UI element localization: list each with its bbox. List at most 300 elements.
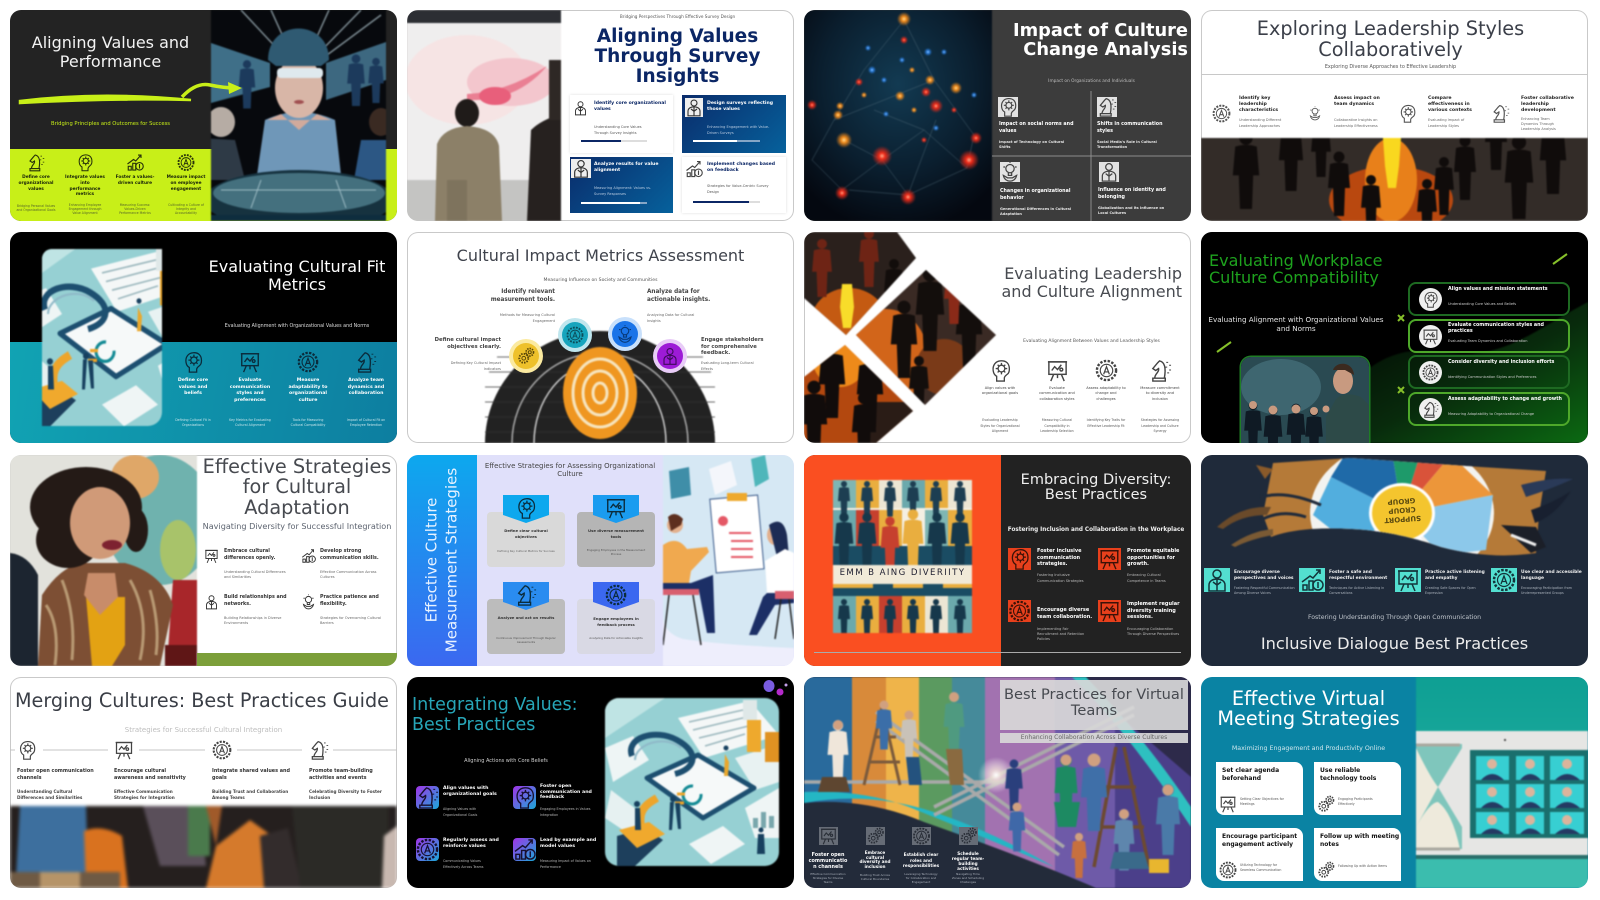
icon — [1419, 288, 1442, 311]
note: Evaluating Team Dynamics and Collaboration — [1448, 339, 1527, 343]
label: Engage employees in — [593, 616, 639, 621]
label: inclusion — [1152, 397, 1168, 401]
note — [1521, 586, 1572, 596]
item: Practice active listening and empathy — [1395, 568, 1487, 600]
label: sessions. — [1127, 614, 1153, 620]
poster: diversity illustration — [833, 480, 972, 633]
icon — [1098, 548, 1121, 570]
cell: Changes in organizational behavior — [998, 159, 1090, 219]
label — [1521, 96, 1574, 114]
card base — [577, 599, 655, 654]
card: Define clear cultural objectives — [487, 495, 565, 567]
item: Regularly assess and reinforce values — [416, 838, 506, 874]
label: adaptability to — [288, 385, 328, 390]
title: Best Practices for Virtual — [1004, 686, 1184, 703]
item: Identify key leadership characteristics — [1209, 95, 1297, 135]
card: Use reliable technology tools — [1314, 762, 1401, 815]
label: feedback process — [597, 622, 635, 626]
note — [1240, 797, 1284, 808]
note: Bridging Personal Values — [17, 204, 55, 208]
label: regular team- — [952, 856, 984, 861]
label: Analyze team — [348, 378, 384, 383]
wheel centre text: SUPPORT — [1384, 514, 1421, 524]
item: Implement regular diversity training sessions — [1098, 600, 1186, 644]
label: Analyze results for value — [594, 162, 658, 167]
footer rule — [814, 652, 1181, 653]
panel: Integrating Values Best Practices slide — [407, 677, 794, 888]
note — [224, 418, 276, 428]
note: Value Alignment — [72, 211, 98, 215]
item: Promote team-building activities and events — [309, 739, 397, 803]
label: communicatio — [809, 858, 847, 864]
icon — [959, 827, 978, 845]
note: Engagement — [533, 319, 555, 323]
note: Assessments — [517, 640, 535, 644]
note: Underrepresented Groups — [1521, 591, 1564, 595]
note: Insights — [647, 319, 661, 323]
icon — [355, 351, 377, 373]
title: Insights — [636, 66, 719, 87]
note — [309, 789, 382, 801]
title — [1000, 687, 1188, 718]
note: Enhancing Team — [1521, 117, 1550, 121]
heading: Effective Strategies for Assessing Organizational — [485, 462, 655, 470]
note: Indicators — [484, 367, 501, 371]
callout: Analyze data for actionable insights — [647, 288, 735, 326]
label: feedback. — [701, 350, 730, 356]
subtitle: Exploring Diverse Approaches to Effective Leadership — [1325, 64, 1456, 70]
note: Generational Differences in Cultural — [1000, 207, 1071, 211]
label — [647, 288, 710, 304]
item: Measure commitment to diversity and inclusion — [1134, 356, 1186, 436]
note: Leadership Selection — [1040, 429, 1074, 433]
item: Foster open communication channels — [17, 739, 109, 803]
label: Align values with — [443, 786, 488, 791]
label: Impact on social norms and — [999, 122, 1074, 127]
title: Evaluating Cultural Fit — [209, 257, 385, 276]
title: Effective Strategies — [203, 455, 391, 478]
title: Change Analysis — [1023, 39, 1188, 60]
subtitle: Aligning Actions with Core Beliefs — [464, 758, 548, 764]
title — [412, 695, 577, 735]
option: Consider diversity and inclusion efforts — [1408, 355, 1570, 389]
item: Compare effectiveness in various contexts — [1398, 95, 1486, 135]
note: Social Media's Role in Cultural — [1097, 140, 1157, 144]
note — [594, 125, 642, 135]
panel: Cultural Impact Metrics Assessment slide — [407, 232, 794, 443]
progress bar — [581, 140, 647, 142]
note — [707, 125, 770, 135]
label — [1234, 570, 1294, 582]
title — [1201, 18, 1580, 60]
note — [540, 859, 591, 870]
note — [1000, 207, 1071, 217]
label: Assess impact on — [1334, 96, 1380, 101]
note — [1240, 863, 1281, 874]
note: Measuring Success: — [120, 203, 150, 207]
label: Foster collaborative — [1521, 96, 1574, 101]
label — [707, 100, 773, 112]
icon — [204, 594, 219, 610]
label: Measure impact — [167, 175, 205, 180]
note — [1031, 418, 1083, 434]
label: communication — [1037, 555, 1080, 561]
item: Schedule regular team-building activities — [946, 827, 990, 887]
note: Evaluating Long-term Cultural — [701, 361, 754, 365]
teal lower band — [10, 342, 397, 443]
note — [1428, 118, 1464, 129]
icon — [1419, 325, 1442, 348]
label: beliefs — [184, 391, 202, 396]
label — [540, 838, 596, 851]
panel: Effective Virtual Meeting Strategies slide — [1201, 677, 1588, 888]
label: Use reliable — [1320, 767, 1360, 774]
label — [1320, 833, 1399, 849]
subtitle: and Norms — [1276, 324, 1316, 332]
label: goals — [212, 775, 227, 781]
title: Metrics — [268, 275, 326, 294]
label — [467, 288, 555, 304]
note: Measuring Cultural — [1042, 418, 1072, 422]
note: Encouraging Participation from — [1521, 586, 1572, 590]
item: Build relationships and networks — [203, 594, 298, 630]
note — [974, 418, 1026, 434]
title: for Cultural — [243, 475, 351, 498]
label: Foster open — [540, 784, 571, 789]
note: Tools for Measuring — [293, 418, 323, 422]
label: characteristics — [1239, 108, 1278, 113]
title — [594, 26, 760, 87]
item: Align values with organizational goals — [974, 356, 1026, 436]
note: Meetings — [1240, 802, 1255, 806]
note — [1080, 418, 1132, 429]
image: isometric documents — [605, 698, 779, 866]
note: Communicating Values — [443, 859, 481, 863]
note: Leveraging Technology — [904, 872, 938, 876]
photo: diamond crops of silhouettes around glowing figure — [804, 232, 997, 443]
label: Encourage participant — [1222, 833, 1297, 840]
callout: Engage stakeholders for comprehensive feedback — [701, 337, 789, 373]
label: challenges — [1096, 397, 1116, 401]
panel: Effective Culture Measurement Strategies slide — [407, 455, 794, 666]
label: values — [28, 187, 44, 192]
note: Aligning Values with — [443, 807, 476, 811]
icon — [182, 351, 204, 373]
icon — [416, 838, 439, 861]
label: Embrace — [865, 850, 885, 855]
item: Embrace cultural differences openly — [203, 548, 298, 584]
subtitle: Evaluating Alignment with Organizational Values — [1208, 315, 1384, 324]
card: Analyze results for value alignment — [570, 157, 673, 213]
label: Assess adaptability to — [1086, 386, 1126, 390]
note: Identifying Communication Styles and Preferences — [1448, 375, 1536, 379]
sparkles — [1201, 232, 1588, 443]
label — [1080, 386, 1132, 402]
label: Design surveys reflecting — [707, 101, 773, 106]
note: Accountability — [175, 211, 197, 215]
note: Understanding Cultural Differences — [224, 570, 286, 574]
note: Inclusion — [309, 795, 330, 800]
panel: Impact of Culture Change Analysis slide — [804, 10, 1191, 221]
title — [1201, 689, 1416, 729]
note: Strategies for Integration — [114, 795, 175, 800]
callout: Identify relevant measurement tools — [467, 288, 555, 326]
label: for comprehensive — [701, 344, 757, 350]
photo: two people viewing a data wall — [407, 10, 562, 221]
icon — [819, 827, 838, 845]
card base — [487, 512, 565, 567]
label: Encourage diverse — [1037, 607, 1089, 613]
label: on feedback — [707, 168, 739, 173]
label — [17, 768, 94, 782]
note: Through Survey Insights — [594, 131, 637, 135]
note: Organizational Goals — [443, 813, 477, 817]
note: Survey Responses — [594, 192, 626, 196]
label: behavior — [1000, 196, 1024, 201]
panel: Effective Strategies for Cultural Adaptation slide — [10, 455, 397, 666]
note — [899, 872, 943, 884]
label: Promote team-building — [309, 768, 373, 774]
note — [413, 360, 501, 373]
card: Follow up with meeting notes — [1314, 828, 1401, 881]
icon — [1098, 600, 1121, 622]
label: Compare — [1428, 96, 1452, 101]
note: Measuring Alignment: Values vs. — [594, 186, 651, 190]
icon — [1491, 104, 1510, 123]
title: Collaboratively — [1318, 38, 1463, 61]
note: Integrity and — [176, 207, 196, 211]
label: values — [594, 107, 611, 112]
label — [282, 378, 334, 405]
kicker: Bridging Perspectives Through Effective Survey Design — [620, 14, 735, 19]
vertical title — [422, 454, 464, 666]
note: Strategies for Value-Centric Survey — [707, 184, 769, 188]
node: blue — [607, 316, 643, 352]
label — [707, 162, 775, 173]
label: Define cultural impact — [435, 337, 501, 343]
icon — [989, 359, 1012, 382]
card: Implement changes based on feedback — [682, 157, 786, 213]
note: Creating Safe Spaces for Open — [1425, 586, 1476, 590]
label: styles and — [236, 391, 264, 396]
label: driven culture — [118, 181, 152, 186]
progress bar — [693, 201, 760, 203]
progress bar — [581, 202, 647, 204]
note — [999, 140, 1064, 149]
label: Practice active listening — [1425, 570, 1485, 575]
subtitle: Evaluating Alignment Between Values and Leadership Styles — [1023, 339, 1160, 344]
note: Effective Communication — [810, 872, 846, 876]
label: Establish clear — [904, 852, 938, 857]
label — [577, 616, 655, 627]
icon — [513, 838, 536, 861]
label: Engage stakeholders — [701, 337, 764, 343]
label: Develop strong — [320, 549, 361, 554]
label — [974, 386, 1026, 397]
label: Encourage diverse — [1234, 570, 1280, 575]
label: on employee — [170, 181, 202, 186]
label: collaboration — [349, 391, 383, 396]
note — [16, 204, 56, 212]
image: isometric documents — [42, 249, 162, 426]
note — [68, 203, 102, 215]
title — [32, 33, 189, 71]
item: Integrate values into performance metrics — [65, 154, 105, 215]
note: Seamless Communication — [1240, 868, 1281, 872]
label — [413, 337, 501, 351]
label: leadership — [1239, 102, 1267, 107]
node: teal — [557, 317, 593, 353]
label: Lead by example and — [540, 838, 596, 843]
side bar with vertical title — [407, 455, 477, 666]
label: building — [958, 861, 978, 866]
label — [1222, 767, 1279, 783]
title: Integrating Values: — [412, 695, 577, 715]
note: Understanding Core Values — [594, 125, 642, 129]
icon — [127, 154, 144, 171]
note: Performance Metrics — [119, 211, 151, 215]
note: Leadership Analysis — [1521, 127, 1556, 131]
badge icon — [501, 495, 551, 523]
note: Synergy — [1153, 429, 1167, 433]
note: Compatibility in — [1044, 424, 1070, 428]
note — [168, 203, 204, 215]
label: practices — [1448, 329, 1473, 334]
label: Consider diversity and inclusion efforts — [1448, 360, 1554, 365]
label — [487, 528, 565, 539]
note: Enhancing Employee — [69, 203, 101, 207]
label — [1037, 607, 1092, 620]
icon — [29, 154, 44, 172]
label — [224, 549, 275, 562]
card: Analyze and act on results — [487, 582, 565, 654]
icon — [575, 101, 586, 116]
icon — [416, 786, 439, 809]
item: Use clear and accessible language — [1491, 568, 1583, 600]
label — [1425, 570, 1485, 582]
label — [1097, 121, 1162, 134]
label: Evaluate — [239, 378, 261, 383]
label: growth. — [1127, 561, 1149, 567]
note — [17, 789, 82, 801]
note: Local Cultures — [1098, 211, 1126, 215]
label: leadership — [1521, 102, 1549, 107]
badge icon — [591, 495, 641, 523]
icon — [685, 98, 703, 117]
note: Dynamics Through — [1521, 122, 1554, 126]
orange sidebar — [804, 455, 1001, 666]
label: belonging — [1098, 195, 1125, 200]
item: Evaluate communication styles and preferences — [224, 348, 276, 432]
note: Understanding Core Values and Beliefs — [1448, 302, 1516, 306]
label: Align values with — [985, 386, 1015, 390]
note: Key Metrics for Evaluating — [229, 418, 271, 422]
title: Best Practices — [1045, 486, 1147, 502]
badge icon — [501, 582, 551, 610]
label: diversity and — [860, 859, 890, 864]
label: Embrace cultural — [224, 549, 270, 554]
note: Leadership Styles — [1428, 124, 1459, 128]
note — [119, 203, 151, 215]
label: Integrate values — [65, 175, 105, 180]
label — [18, 174, 54, 192]
note — [320, 570, 376, 581]
subtitle: Impact on Organizations and Individuals — [1048, 79, 1135, 84]
label — [594, 100, 666, 112]
label: styles — [1097, 129, 1113, 134]
note: Performance — [540, 865, 561, 869]
label — [946, 851, 990, 871]
note: Strategies for Overcoming Cultural — [320, 616, 381, 620]
note: Collaborative Insights on — [1334, 118, 1377, 122]
label: dynamics and — [348, 385, 384, 390]
note: Communication Strategies — [1037, 579, 1084, 583]
note: Values-Driven — [124, 207, 146, 211]
note: Teams — [824, 880, 832, 884]
note — [647, 312, 694, 324]
label: model values — [540, 844, 575, 849]
item: Develop strong communication skills — [300, 548, 395, 584]
label — [899, 852, 943, 868]
note: Process — [611, 552, 621, 556]
subtitle: Bridging Principles and Outcomes for Success — [51, 121, 170, 127]
note — [467, 312, 555, 324]
title — [1209, 252, 1382, 287]
item: Foster collaborative leadership development — [1491, 95, 1583, 137]
icon — [513, 786, 536, 809]
label: diversity training — [1127, 608, 1176, 614]
node: purple — [652, 338, 688, 374]
label: reinforce values — [443, 844, 486, 849]
label: Foster inclusive — [1037, 548, 1081, 554]
label: Measure — [297, 378, 319, 383]
title: Adaptation — [244, 496, 350, 519]
title — [1001, 473, 1191, 502]
card: Set clear agenda beforehand — [1216, 762, 1303, 815]
label: to diversity and — [1146, 391, 1174, 395]
label: engagement actively — [1222, 841, 1293, 848]
label — [1329, 570, 1387, 582]
panel: Aligning Values Through Survey Insights slide — [407, 10, 794, 221]
illustration: diverse team building a structure — [804, 677, 1191, 888]
title: Embracing Diversity: — [1021, 472, 1171, 488]
label — [167, 378, 219, 398]
title: Teams — [1071, 702, 1117, 718]
note — [1425, 586, 1476, 596]
label — [167, 174, 206, 192]
label: culture — [299, 398, 317, 403]
label: Foster a values- — [116, 175, 154, 180]
label: flexibility. — [320, 602, 347, 606]
label: roles and — [910, 858, 932, 862]
label: awareness and sensitivity — [114, 775, 186, 781]
item: Foster open communication channels — [806, 827, 850, 887]
label: Set clear agenda — [1222, 767, 1279, 774]
note: Competence in Teams — [1127, 579, 1166, 583]
note: Strategies for Assessing — [1141, 418, 1179, 422]
note — [114, 789, 175, 801]
panel: Evaluating Leadership and Culture Alignment slide — [804, 232, 1191, 443]
note — [1338, 797, 1373, 808]
note: Analyzing Data for Actionable Insights — [589, 636, 643, 640]
label: Define core — [22, 175, 50, 180]
item: Promote equitable opportunities for growth — [1098, 548, 1186, 590]
item: Encourage cultural awareness and sensitivity — [114, 739, 206, 803]
note: Expression — [1425, 591, 1443, 595]
item: Integrate shared values and goals — [212, 739, 304, 803]
label: communication — [230, 385, 270, 390]
photo: glowing network of people — [804, 10, 992, 221]
